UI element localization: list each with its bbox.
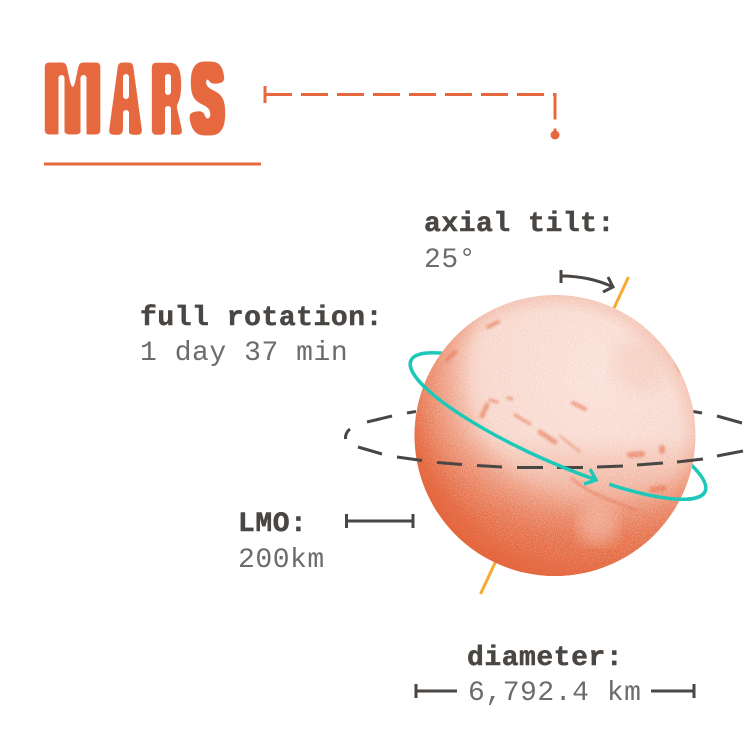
teal orbit, front with arrow (410, 360, 705, 499)
LMO label: LMO: (238, 509, 307, 540)
axial tilt label (424, 209, 615, 276)
full rotation label: full rotation: (140, 303, 383, 334)
title: S (192, 42, 223, 155)
axis line (480, 277, 628, 594)
dashed connector (265, 86, 560, 140)
dashed orbit, front (358, 447, 743, 468)
title: R (154, 42, 179, 154)
LMO measure bar (346, 514, 413, 528)
full rotation label: 1 day 37 min (140, 338, 348, 369)
full rotation label (140, 303, 383, 369)
axial tilt label: 25° (424, 245, 476, 276)
diameter measure bars (416, 684, 694, 698)
title underline (44, 162, 261, 166)
title (44, 42, 223, 156)
LMO label: 200km (238, 545, 325, 576)
axial tilt label: axial tilt: (424, 209, 615, 240)
title: A (112, 44, 139, 156)
diameter label: 6,792.4 km (468, 678, 642, 709)
LMO label (238, 509, 325, 576)
diameter label (467, 643, 642, 709)
tilt arrow (561, 270, 613, 292)
planet Mars (414, 295, 696, 576)
title: M (44, 44, 101, 155)
diameter label: diameter: (467, 643, 623, 674)
dashed orbit, rear (345, 412, 742, 439)
teal orbit, rear (396, 328, 720, 524)
